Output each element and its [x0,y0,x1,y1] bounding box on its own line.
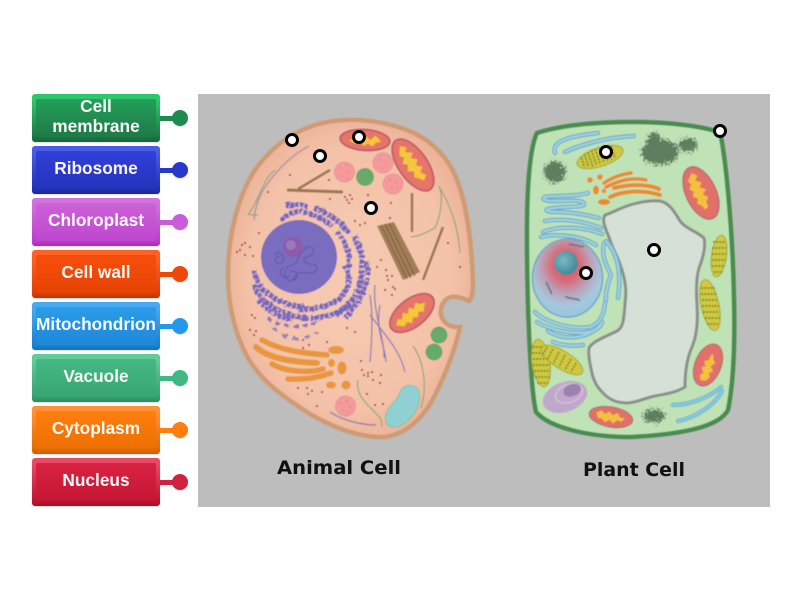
label: Cytoplasm: Cytoplasm [52,418,140,438]
label: Ribosome: Ribosome [54,158,138,178]
label: Ribosome [32,146,188,195]
golgi apparatus [256,340,350,390]
plant cell title: Plant Cell [583,459,685,481]
label: Mitochondrion [32,302,188,351]
plant nucleus [532,239,602,317]
green vesicles [356,168,447,360]
label: Nucleus: Nucleus [62,470,130,490]
animal nucleus [261,220,337,294]
label: Chloroplast: Chloroplast [48,210,144,230]
label: Cell membrane: Cell [80,96,112,116]
plant endoplasmic reticulum outlines [535,133,722,421]
plant cell wall and cytoplasm [527,122,734,437]
animal vacuole [385,385,420,427]
chloroplasts right [696,234,729,332]
label: Nucleus [32,458,188,507]
answer markers [286,126,726,278]
label: Cytoplasm [32,406,188,455]
lysosomes [334,153,403,416]
label: Vacuole: Vacuole [63,366,129,386]
centriole bundle [377,222,420,280]
purple organelle [538,375,592,419]
animal cell title: Animal Cell [277,457,401,479]
mitochondrion top [339,128,391,152]
free ribosomes [237,175,460,406]
background panel [198,94,770,507]
label: Vacuole [32,354,188,403]
rough endoplasmic reticulum [254,205,368,339]
plant endoplasmic reticulum lumen [535,133,722,421]
animal cell body and membrane [228,120,473,437]
mitochondrion right [676,161,726,225]
plant dense clusters [544,132,698,423]
label: Mitochondrion: Mitochondrion [36,314,156,334]
mitochondrion bottom [588,403,634,431]
label: Chloroplast [32,198,188,247]
chloroplasts lower left [529,338,587,388]
plant vacuole [589,201,705,403]
lysosome speckles [340,160,397,412]
label: Cell wall: Cell wall [61,262,131,282]
diagram: animal and plant cells [198,94,770,507]
mitochondrion lower right [383,286,441,340]
plant golgi [587,173,660,205]
mitochondrion lower right [688,340,728,390]
animal cell [228,120,473,437]
filaments [248,146,460,427]
label: Cell membrane: membrane [52,116,140,136]
plant cell [527,122,734,437]
mitochondrion upper right [384,132,442,198]
label: Cell wall [32,250,188,299]
chloroplast top [574,141,626,173]
microtubule rods [287,170,443,280]
label: Cell membrane [32,94,188,143]
